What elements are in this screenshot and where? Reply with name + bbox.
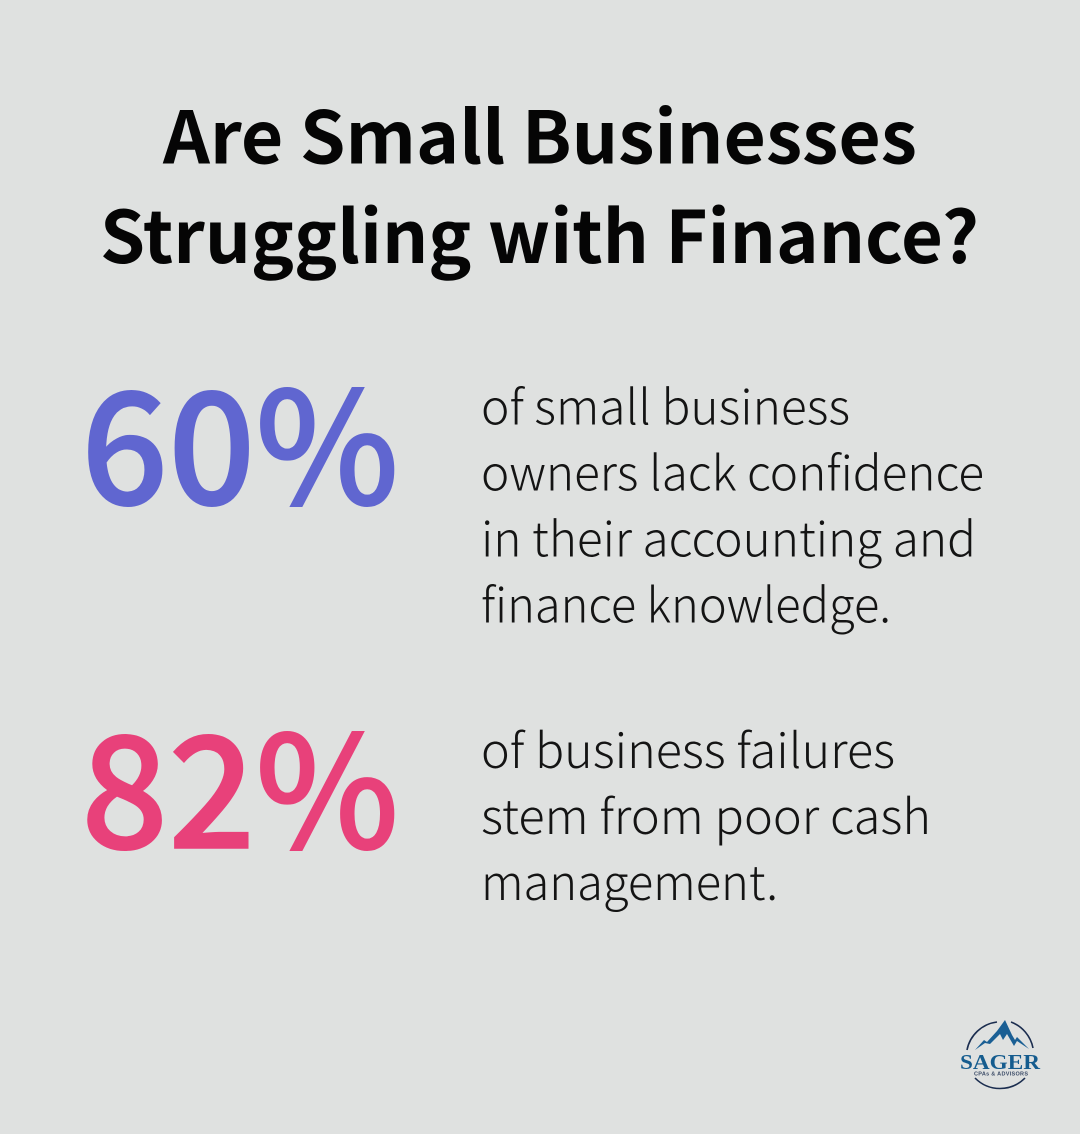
logo: Sager CPAs & Advisors <box>960 1020 1041 1089</box>
text block: 60% description <box>481 368 984 636</box>
stat: 60%: 60% <box>81 324 399 549</box>
text block: 60% description: of small business <box>481 368 850 438</box>
icon: mountains <box>975 1020 1029 1050</box>
text block: 82% description: management. <box>481 844 778 914</box>
text block: 60% description: owners lack confidence <box>481 434 984 504</box>
title: Struggling with Finance? <box>100 179 979 284</box>
logo tagline: CPAs & ADVISORS <box>974 1072 1028 1078</box>
title <box>100 80 979 284</box>
title: Are Small Businesses <box>162 80 917 184</box>
text block: 82% description: of business failures <box>481 712 895 782</box>
text block: 60% description: in their accounting and <box>481 500 976 570</box>
text block: 60% description: finance knowledge. <box>481 566 891 636</box>
stat: 82%: 82% <box>81 668 399 893</box>
text block: 82% description <box>481 712 931 914</box>
logo wordmark: SAGER <box>960 1050 1041 1074</box>
text block: 82% description: stem from poor cash <box>481 778 931 848</box>
